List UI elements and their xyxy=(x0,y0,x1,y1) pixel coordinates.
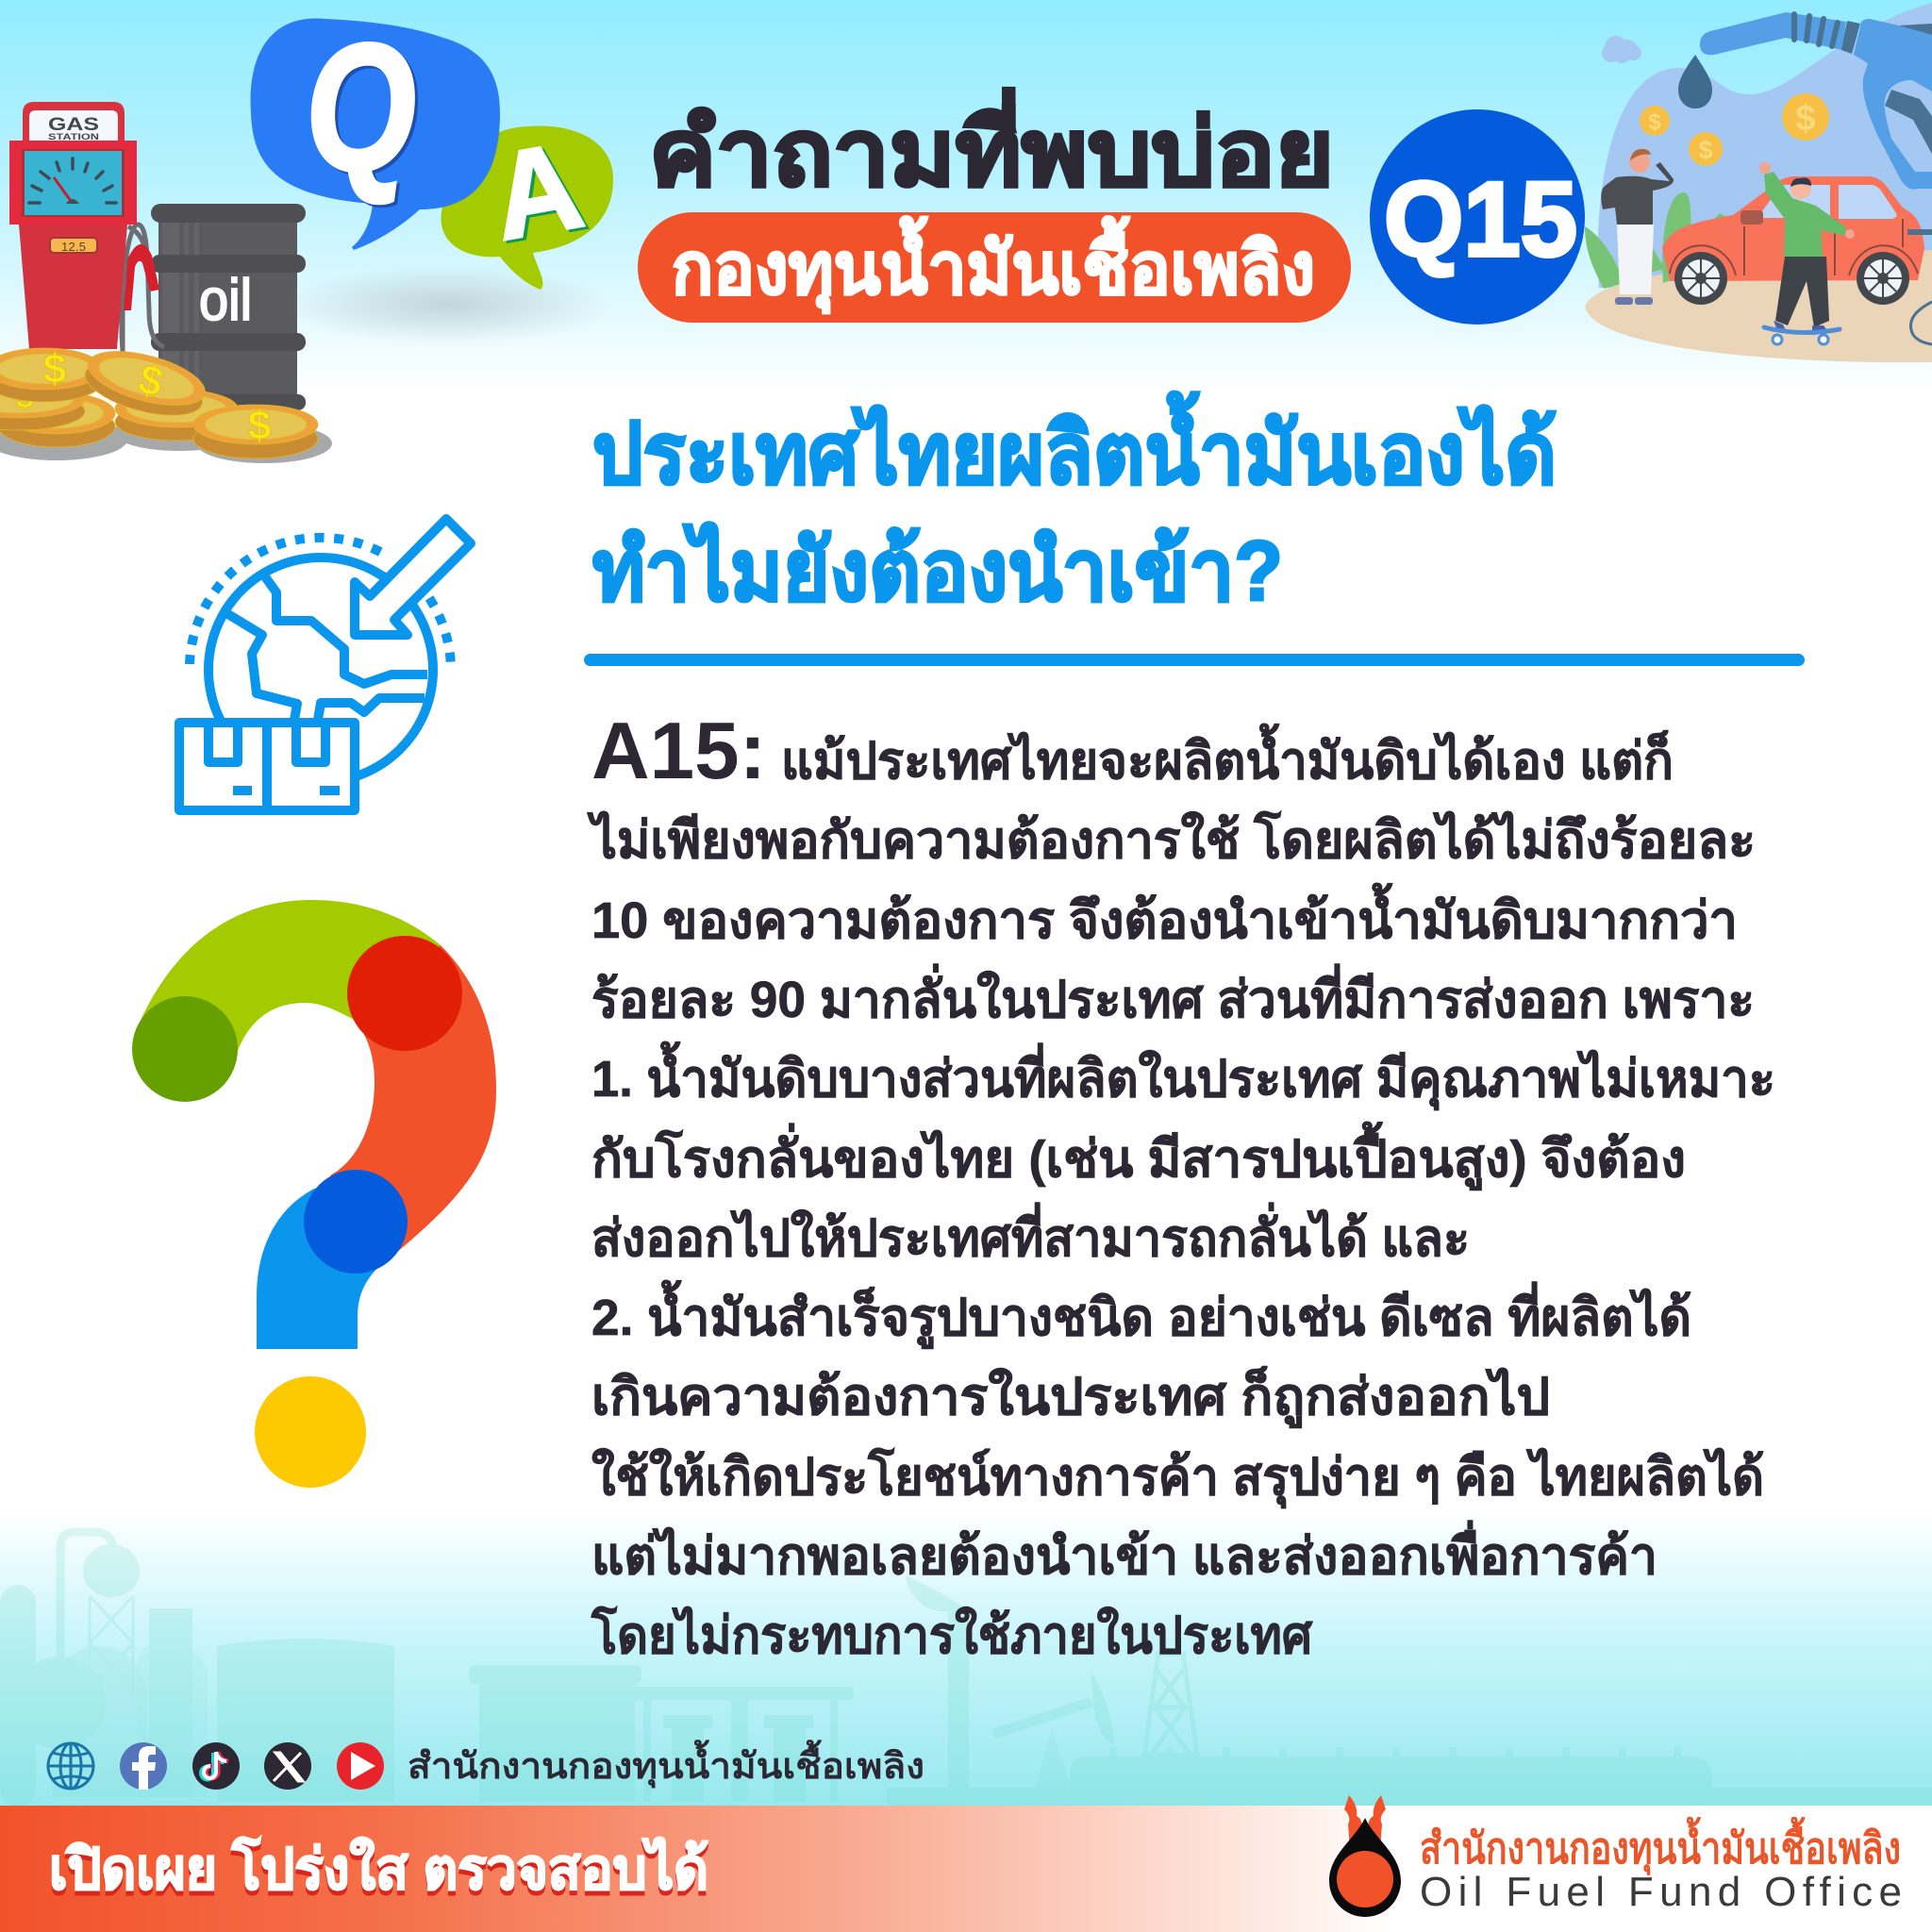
icon: globe with import arrow and boxes xyxy=(179,519,471,810)
blue divider line xyxy=(584,654,1805,666)
logo drop xyxy=(1329,1818,1401,1917)
answer bubble: A xyxy=(482,115,591,266)
answer label: A15: xyxy=(591,707,766,796)
answer body text: ใช้ให้เกิดประโยชน์ทางการค้า สรุปง่าย ๆ คือ ไทยผลิตได้ xyxy=(591,1447,1764,1509)
social media row xyxy=(48,1740,924,1790)
coin pile shadow xyxy=(0,413,332,463)
red car xyxy=(1662,176,1932,305)
answer bubble xyxy=(441,115,613,290)
fuel hose and nozzle xyxy=(122,225,164,354)
gas pump: 12.5 xyxy=(61,240,86,254)
orange subtitle pill xyxy=(638,212,1351,323)
stacked gold coins xyxy=(0,341,318,458)
ground xyxy=(1585,250,1932,362)
question bubble: Q xyxy=(300,5,422,210)
gas pump xyxy=(9,102,137,349)
answer body text xyxy=(587,707,1775,1664)
answer body text: ส่งออกไปให้ประเทศที่สามารถกลั่นได้ และ xyxy=(591,1202,1470,1267)
blue blob backdrop xyxy=(1598,3,1932,288)
cloud xyxy=(1602,36,1641,63)
footer band xyxy=(0,1806,1932,1932)
dollar coins: $ xyxy=(1698,136,1713,164)
fuel drop xyxy=(1678,55,1712,108)
Q15 badge xyxy=(1370,109,1585,325)
gas pump: GAS xyxy=(48,115,99,135)
main title: คำถามที่พบบ่อย xyxy=(649,88,1334,205)
answer body text: เกินความต้องการในประเทศ ก็ถูกส่งออกไป xyxy=(591,1367,1550,1428)
stacked gold coins: $ xyxy=(43,346,66,392)
Q15 badge: Q15 xyxy=(1384,160,1577,278)
fuel hose in car xyxy=(1911,302,1932,344)
orange subtitle pill: กองทุนน้ำมันเชื้อเพลิง xyxy=(672,216,1315,314)
question bubble: Q xyxy=(303,8,425,213)
bubble shadow xyxy=(282,265,612,344)
icon: facebook xyxy=(120,1742,167,1790)
gas pump: STATION xyxy=(48,132,99,142)
worried man xyxy=(1601,149,1674,305)
stacked gold coins: $ xyxy=(248,403,271,449)
header illustration: gas pump, oil barrel and coins xyxy=(0,102,332,463)
answer bubble: A xyxy=(486,118,595,268)
answer body text: กับโรงกลั่นของไทย (เช่น มีสารปนเปื้อนสูง) จึงต้อง xyxy=(591,1122,1686,1191)
logo flame xyxy=(1344,1795,1386,1848)
Oil Fuel Fund Office logo xyxy=(1329,1795,1902,1917)
answer body text: 10 ของความต้องการ จึงต้องนำเข้าน้ำมันดิบมากกว่า xyxy=(591,883,1738,949)
Oil Fuel Fund Office logo: Oil Fuel Fund Office xyxy=(1420,1869,1902,1915)
dollar coins xyxy=(1640,93,1829,166)
stacked gold coins: $ xyxy=(134,356,168,407)
oil barrel xyxy=(151,204,306,410)
stacked gold coins: $ xyxy=(16,380,33,414)
answer body text: 2. น้ำมันสำเร็จรูปบางชนิด อย่างเช่น ดีเซล ที่ผลิตได้ xyxy=(591,1280,1691,1349)
question heading: ประเทศไทยผลิตน้ำมันเองได้ xyxy=(592,391,1557,502)
answer body text: โดยไม่กระทบการใช้ภายในประเทศ xyxy=(591,1606,1313,1664)
icon: tiktok xyxy=(192,1742,240,1790)
icon: youtube xyxy=(337,1742,384,1790)
footer slogan: เปิดเผย โปร่งใส ตรวจสอบได้ xyxy=(49,1840,708,1906)
question bubble xyxy=(251,5,500,250)
answer body text: แต่ไม่มากพอเลยต้องนำเข้า และส่งออกเพื่อการค้า xyxy=(591,1520,1657,1585)
answer body text: ร้อยละ 90 มากลั่นในประเทศ ส่วนที่มีการส่งออก เพราะ xyxy=(591,963,1755,1028)
header illustration: car, people and fuel nozzle xyxy=(1585,3,1932,362)
question heading: ทำไมยังต้องนำเข้า? xyxy=(592,523,1283,619)
car wheels xyxy=(1674,252,1727,305)
icon: website globe xyxy=(48,1743,93,1789)
oil barrel: oil xyxy=(199,268,252,333)
boy on skateboard xyxy=(1759,162,1855,344)
question heading xyxy=(592,391,1557,619)
dollar coins: $ xyxy=(1648,109,1661,135)
social account name: สำนักงานกองทุนน้ำมันเชื้อเพลิง xyxy=(408,1740,924,1789)
icon: X xyxy=(264,1742,311,1790)
answer body text: 1. น้ำมันดิบบางส่วนที่ผลิตในประเทศ มีคุณภาพไม่เหมาะ xyxy=(591,1041,1775,1111)
answer body text: แม้ประเทศไทยจะผลิตน้ำมันดิบได้เอง แต่ก็ xyxy=(781,724,1674,790)
leaves xyxy=(1585,192,1726,289)
fuel nozzle xyxy=(1700,12,1932,190)
icon: multi-coloured question mark xyxy=(132,900,496,1488)
industrial skyline silhouette xyxy=(0,1532,1932,1811)
Q and A speech bubbles xyxy=(251,5,613,344)
answer body text: ไม่เพียงพอกับความต้องการใช้ โดยผลิตได้ไม่ถึงร้อยละ xyxy=(587,810,1756,869)
footer slogan: เปิดเผย โปร่งใส ตรวจสอบได้ xyxy=(49,1836,708,1901)
dollar coins: $ xyxy=(1795,99,1816,139)
